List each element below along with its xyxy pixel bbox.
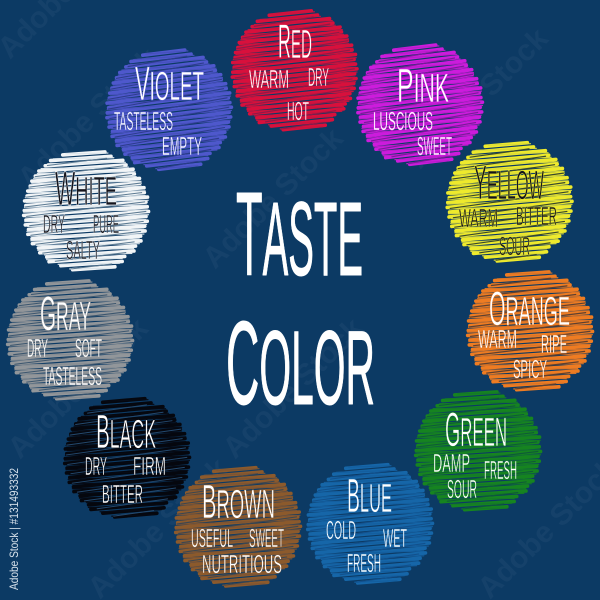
panel: green: GREEN [445, 404, 507, 457]
stock id label: Adobe Stock | #131493332 [7, 468, 21, 590]
heading: pink: PINK [397, 60, 449, 113]
panel: brown [171, 464, 305, 590]
words: yellow: WARM [459, 203, 498, 233]
words: yellow [459, 201, 557, 261]
watermark pattern: Adobe Stock [217, 312, 370, 465]
words: green [433, 448, 517, 504]
words: black [85, 451, 166, 509]
words: pink: LUSCIOUS [373, 106, 433, 136]
words: brown: USEFUL [191, 523, 233, 553]
words: black: FIRM [133, 451, 166, 481]
panel: green: FRESH [484, 455, 517, 485]
panel: blue: BLUE [347, 470, 392, 523]
panel: white [20, 149, 152, 274]
words: violet [114, 106, 202, 161]
panel: white: PURE [93, 209, 119, 239]
panel: orange [464, 269, 596, 394]
panel: pink: SWEET [417, 131, 452, 161]
panel: gray [4, 278, 136, 403]
panel: red: DRY [308, 62, 329, 92]
panel: yellow [442, 139, 577, 265]
words: brown: NUTRITIOUS [202, 549, 282, 579]
panel: green [412, 389, 544, 514]
words: orange: WARM [478, 324, 517, 354]
words: orange [478, 324, 567, 384]
panel: brown: SWEET [249, 523, 284, 553]
words: blue: COLD [326, 515, 356, 545]
watermark pattern: Adobe Stock [12, 42, 165, 195]
panel: gray: SOFT [75, 333, 102, 363]
words: red [249, 62, 329, 126]
panel: violet: EMPTY [162, 131, 202, 161]
words: blue: FRESH [347, 548, 381, 578]
panel: pink [351, 40, 489, 170]
words: violet: TASTELESS [114, 106, 173, 136]
panel: red: RED [278, 16, 312, 69]
panel: black [60, 395, 194, 521]
panel: red [226, 7, 362, 135]
words: gray [27, 333, 102, 391]
watermark pattern: Adobe Stock [197, 122, 350, 275]
heading: white: WHITE [55, 163, 117, 216]
text: COLOR [226, 297, 375, 430]
words: green: SOUR [447, 474, 477, 504]
heading: gray: GRAY [40, 288, 91, 341]
words: yellow: SOUR [499, 231, 530, 261]
words: white [43, 209, 119, 265]
panel: black: BLACK [96, 406, 156, 459]
words: black: BITTER [102, 479, 143, 509]
words: black: DRY [85, 451, 107, 481]
heading: brown: BROWN [202, 476, 275, 529]
watermark pattern: Adobe Stock [2, 312, 155, 465]
words: red: HOT [287, 96, 309, 126]
words: white: SALTY [66, 235, 100, 265]
words: brown [191, 523, 284, 579]
text: TASTE [236, 168, 363, 301]
words: pink [373, 106, 452, 161]
panel: gray: TASTELESS [43, 361, 102, 391]
watermark pattern: Adobe Stock [402, 22, 555, 175]
words: orange: SPICY [513, 354, 547, 384]
words: white: DRY [43, 209, 65, 239]
heading: violet: VIOLET [135, 58, 204, 111]
words: green: DAMP [433, 448, 470, 478]
panel: orange: RIPE [541, 329, 567, 359]
words: red: WARM [249, 64, 289, 94]
panel: blue: WET [383, 523, 407, 553]
panel: blue [303, 461, 437, 587]
words: gray: DRY [27, 333, 48, 363]
panel: violet [100, 45, 238, 175]
words: blue [326, 515, 407, 578]
